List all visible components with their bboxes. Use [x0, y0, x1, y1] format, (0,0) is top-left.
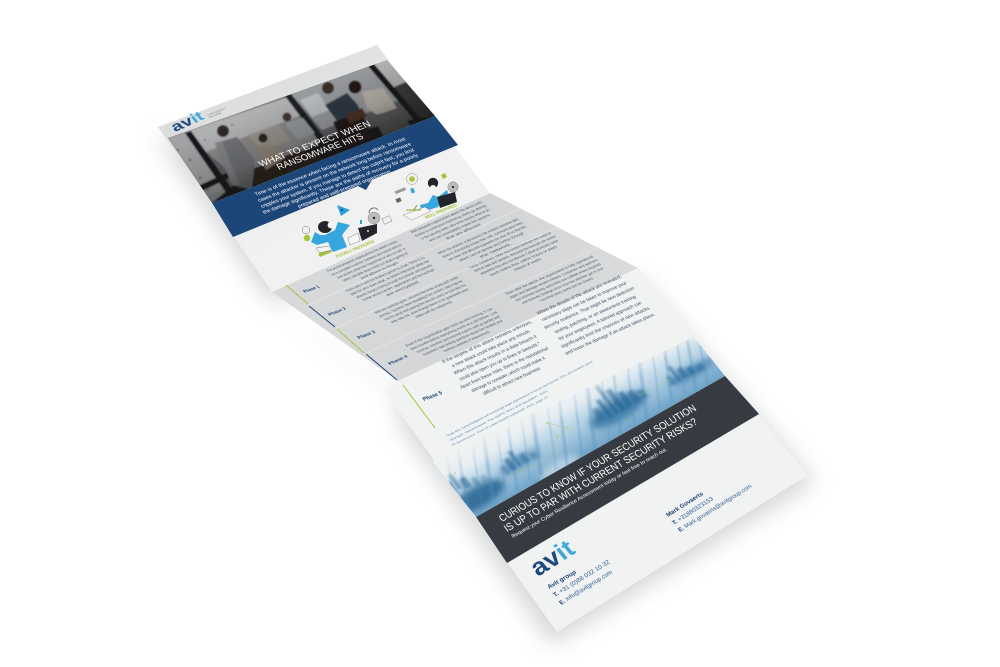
phase 4 well prepared text: how that entry point can be closed. [539, 277, 595, 302]
phase 2 well prepared text: When the attacker is discovered, the incident response plan [437, 218, 520, 255]
call to action heading: CURIOUS TO KNOW IF YOUR SECURITY SOLUTION [497, 403, 699, 524]
city skyline image [433, 330, 725, 522]
illustration: well prepared [395, 173, 458, 220]
phase 4 well prepared text: are informed openly, authorities are notified where required [514, 263, 602, 302]
phase 2 poorly prepared text: further across servers, applications and the backups [361, 268, 436, 302]
panel: grey phases table [272, 193, 638, 381]
phase labels [302, 284, 409, 366]
phase 2 well prepared text: the network. [479, 242, 513, 258]
phase 5 well prepared text: significantly limit the chances of new attacks [560, 305, 652, 350]
footer contact: Avit group: Avit group [546, 569, 578, 591]
phase 3 poorly prepared text: lost for good and paying the ransom starts to look like the [383, 283, 467, 321]
dark water and haze patches [447, 354, 718, 522]
phase 5 well prepared text: necessary steps can be taken to improve your [541, 280, 629, 323]
phase 4 poorly prepared text: Even if the organization gets back up and running, it can [405, 307, 494, 347]
logo tagline: CYBER SECURITY [207, 108, 227, 117]
phase 4 well prepared text: again and damage remains limited. Customers and partners [509, 259, 599, 299]
footer logo avit: avit [524, 535, 581, 582]
phase 5 label: Phase 5 [422, 390, 444, 403]
phase 4 poorly prepared text: revenue, overtime and external experts add up quickly and [415, 315, 501, 354]
phase 1 well prepared text: and can immediately isolate the systems [428, 213, 492, 242]
intro text [254, 136, 420, 216]
phase 1 poorly prepared text: as a complete surprise. Systems are locked and no [330, 243, 403, 276]
phase 1 poorly prepared text [326, 240, 417, 287]
footer contact: Avit group: T. +31 (0)88 032 10 32 [552, 559, 612, 599]
phase 4 well prepared text [504, 255, 612, 310]
intro text: the damage significantly. These are the paths of recovery for a poorly [262, 153, 420, 216]
phase 2 well prepared text [437, 218, 538, 269]
phase 5 well prepared text: When the details of the attack are revealed, [536, 274, 623, 316]
phase 5 poorly prepared text: damage to consider, which could make it [470, 355, 547, 394]
phase 5 poorly prepared text: a new attack could take place any minute. [450, 328, 532, 369]
intro text: Time is of the essence when facing a ransomware attack. In most [254, 136, 408, 198]
footer contact: Avit group: E. info@avitgroup.com [558, 569, 614, 607]
phase 3 poorly prepared text: data will be returned. [414, 300, 454, 319]
phase labels: Phase 3 [356, 330, 377, 340]
phase 2 poorly prepared text: Panic sets in and the business grinds to a halt. There is no [345, 256, 426, 293]
intro text: cases the attacker is present on the network long before ransomware [257, 142, 413, 204]
phase 2 well prepared text: kicks in. Everybody knows their role, communication lines [441, 221, 524, 258]
phase 3 poorly prepared text [373, 276, 477, 329]
skyline buildings [447, 363, 706, 494]
intro text: prepared and well-prepared organization. [297, 169, 394, 210]
phase labels: Phase 4 [387, 354, 409, 366]
phase 1 well prepared text [409, 201, 501, 248]
phase 2 poorly prepared text: plan for who does what, so teams improvise while the [349, 260, 430, 296]
paper drop shadow [155, 135, 815, 645]
phase 3 well prepared text: Once contained, clean and tested backups are used to [468, 231, 552, 269]
phase 4 poorly prepared text: customers start asking questions about the incident and [422, 319, 504, 356]
phase 5 well prepared text: tooling, patching, or an awareness training [553, 294, 638, 335]
footnotes: *Europol, 'Ransomware: The GDPR, fines and reputation', 2021 [448, 389, 549, 442]
phase 3 well prepared text: separately they were not affected. Critical processes come [479, 239, 559, 275]
phase 5 poorly prepared text: If the targets of this attack remains unknown, [441, 319, 534, 365]
hero photograph [168, 60, 435, 203]
phase 4 poorly prepared text: take months before everything works as it did before. Lost [409, 311, 498, 351]
label: poorly prepared: POORLY PREPARED [335, 239, 376, 259]
blue intro band [212, 116, 458, 237]
footnotes: *IT Governance, 'Cost of a data breach explained', 2021, page 12 [450, 395, 549, 447]
footnotes: *Peak AIO, 'Cyberintelligence will increasingly target organizations in the EU and beyond', 2021, Avit research report [445, 359, 594, 438]
call to action subtext: Request your Cyber Resilience Assessment today or feel free to reach out. [511, 447, 669, 540]
phase 1 well prepared text: that are affected. [445, 222, 483, 240]
phase 5 poorly prepared text [441, 319, 550, 397]
phase 1 poorly prepared text: For poorly prepared organizations the attack comes [326, 240, 399, 273]
phase 5 poorly prepared text: difficult to attract new business. [482, 366, 543, 397]
phase 1 well prepared text: thanks to continuous monitoring. Alerts go directly [414, 204, 488, 237]
call to action heading: IS UP TO PAR WITH CURRENT SECURITY RISKS? [502, 417, 700, 534]
intro text: cripples your system. If you manage to detect the culprit fast, you limit [260, 147, 416, 210]
network lines and dots [454, 351, 691, 491]
phase 4 poorly prepared text: business continuity or improvements. [442, 330, 492, 353]
phase 1 well prepared text: Well prepared organizations detect the attack early [409, 201, 483, 234]
phase 5 well prepared text: for your employees. A tailored approach can [558, 300, 644, 342]
phase labels: Phase 1 [302, 284, 321, 294]
phase 4 poorly prepared text [405, 307, 512, 361]
phase 1 well prepared text: to the security team, who know exactly what to do [420, 208, 491, 240]
logo tagline: SOLUTIONS [209, 113, 222, 119]
phase accent lines [286, 285, 397, 380]
phase 5 poorly prepared text: Apart from these risks, there is the reputational [459, 346, 550, 391]
phase 5 poorly prepared text: When this attack results in a data breach it [453, 334, 539, 376]
phase 4 well prepared text: and forensic findings show how the attacker got in and [521, 267, 605, 305]
footer contact: Mark Govaerts: T. +31880323153 [671, 496, 715, 527]
phase 2 well prepared text: are clear and affected segments are shut off so that the [447, 225, 527, 261]
logo: avit small: avit [168, 109, 208, 135]
phase 1 poorly prepared text: and where to begin. [359, 261, 401, 280]
phase 5 well prepared text [536, 274, 657, 357]
illustration: poorly prepared [302, 205, 392, 257]
phase 3 well prepared text [468, 231, 570, 283]
folded brochure [150, 40, 808, 632]
phase 3 well prepared text: restore data and systems. Because the backups are stored [473, 235, 557, 273]
phase 2 poorly prepared text [345, 256, 444, 307]
label: well prepared: WELL PREPARED [424, 202, 459, 220]
phase labels: Phase 2 [327, 306, 348, 317]
phase 2 well prepared text: attack cannot spread any further through [458, 232, 525, 262]
phase 2 poorly prepared text: are encrypted. [385, 280, 421, 297]
panel: lower section [386, 268, 808, 632]
phase 5 well prepared text: and lower the damage if an attack takes place. [564, 312, 657, 357]
phase 3 poorly prepared text: With the backups gone, recovery becomes a long and costly [373, 276, 459, 315]
panel: top section with hero [150, 40, 490, 292]
phase 1 poorly prepared text: one knows what has happened or who to call. It [336, 247, 407, 279]
phase 5 well prepared text: security resilience. That might be new detection [543, 286, 636, 331]
phase 3 poorly prepared text: process. Systems need rebuilding from scratch, data may be [378, 280, 464, 318]
title: WHAT TO EXPECT WHEN [256, 119, 373, 169]
phase 4 well prepared text: Soon after the attack, the organization is fully operational [504, 255, 595, 296]
footnotes [445, 359, 594, 447]
footer contact: Avit group [546, 559, 614, 607]
phase 3 well prepared text: back online first, within hours or days [489, 245, 558, 277]
title: RANSOMWARE HITS [274, 131, 365, 172]
phase 3 poorly prepared text: only way out, even though there is no guarantee your [389, 288, 470, 324]
footer contact: Mark Govaerts: Mark Govaerts [666, 491, 705, 519]
phase 5 poorly prepared text: could also open you up to fines or lawsuits.* [458, 341, 542, 382]
phase 5 accent line [403, 385, 435, 428]
dark call to action band [476, 376, 759, 563]
phase 2 poorly prepared text: attacker keeps moving through the network and spreads [355, 264, 434, 299]
footer contact: Mark Govaerts: E. Mark.govaerts@avitgroup.com [678, 484, 753, 534]
phase 1 poorly prepared text: takes valuable time to find out what is going on [342, 252, 409, 282]
phase 3 well prepared text: instead of weeks. [513, 257, 543, 272]
